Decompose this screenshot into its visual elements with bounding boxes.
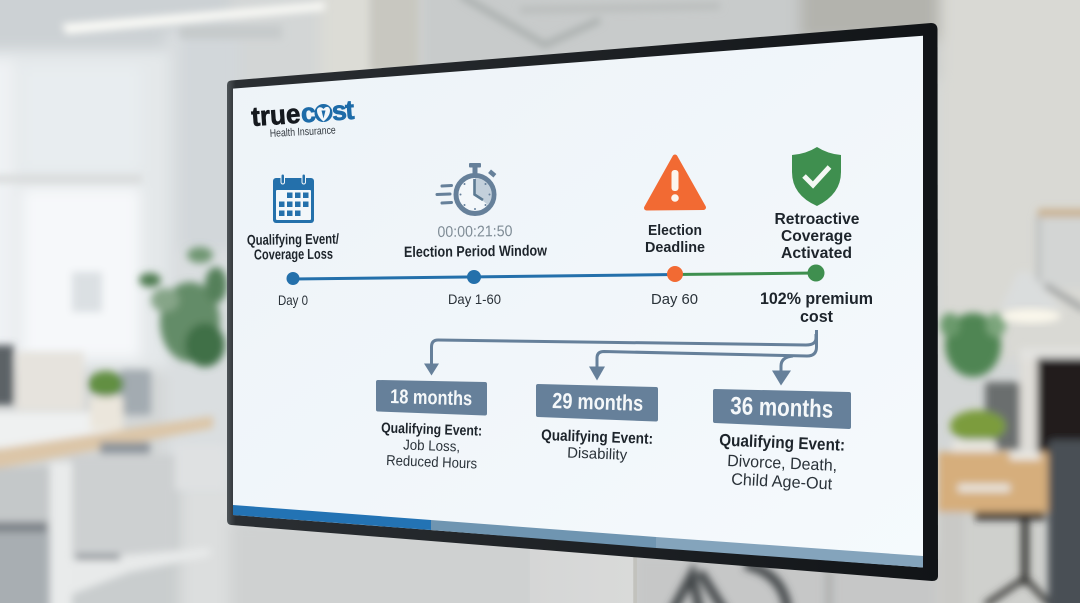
timeline day labels [278, 291, 698, 308]
pendant lamp [1000, 272, 1062, 310]
panel: 36 months: Divorce, Death, [727, 452, 838, 475]
timeline day labels: Day 0 [278, 292, 308, 308]
panel: 36 months: Child Age-Out [731, 471, 833, 493]
panel: 29 months [538, 386, 656, 464]
logo [250, 95, 355, 140]
panel: 18 months: Qualifying Event: [381, 421, 482, 440]
ceiling beam [460, 0, 600, 45]
monitor stand [530, 546, 637, 603]
column [370, 0, 419, 72]
right shelf and dark monitor [1020, 348, 1080, 360]
panel: 36 months [715, 391, 849, 493]
icon: warning triangle [646, 157, 704, 208]
icon: heart [314, 104, 332, 122]
panel: 18 months [378, 382, 485, 472]
right desk [938, 452, 1080, 512]
step headings: Activated [781, 245, 852, 262]
icon: green shield [792, 147, 841, 206]
step headings: Qualifying Event/ [247, 232, 339, 249]
step headings: Election Period Window [404, 243, 547, 261]
icon: stopwatch [437, 163, 496, 214]
panel: 18 months: Job Loss, [403, 438, 460, 455]
chair base under monitor [672, 565, 788, 603]
panel: 18 months: 18 months [390, 386, 472, 410]
premium cost note: cost [800, 308, 833, 326]
timeline [286, 264, 824, 285]
pendant lamp glow [1001, 309, 1061, 323]
window bar [0, 175, 142, 183]
logo: Health Insurance [270, 125, 336, 140]
panel: 36 months: Qualifying Event: [719, 431, 845, 455]
step headings [247, 211, 860, 263]
panel: 29 months: Disability [567, 445, 628, 464]
right plants [945, 313, 1001, 377]
ceiling light [62, 2, 325, 34]
premium cost note: 102% premium [760, 290, 873, 308]
screen panel [233, 36, 923, 567]
timeline day labels: Day 60 [651, 291, 698, 308]
panel: 18 months: Reduced Hours [386, 453, 477, 472]
timer readout: 00:00:21:50 [437, 223, 513, 241]
step headings: Election [648, 222, 702, 239]
panel: 29 months: Qualifying Event: [541, 427, 653, 448]
right wall picture [1040, 216, 1080, 288]
progress bar [233, 505, 923, 568]
branching arrows [424, 330, 816, 386]
panel: 36 months: 36 months [730, 392, 834, 424]
panel: 29 months: 29 months [552, 388, 644, 416]
premium cost note [760, 290, 873, 326]
icon: calendar [273, 174, 314, 223]
step headings: Coverage Loss [254, 247, 333, 263]
step headings: Deadline [645, 239, 705, 256]
step headings: Coverage [781, 228, 852, 245]
left desk scene [0, 345, 14, 405]
floor [170, 490, 240, 603]
logo: cost [300, 95, 355, 129]
wall and ceiling zones [0, 0, 230, 60]
window [0, 50, 168, 370]
monitor bezel [227, 23, 938, 581]
step headings: Retroactive [774, 211, 860, 228]
left office plant [139, 247, 227, 367]
logo: true [250, 99, 301, 132]
timeline day labels: Day 1-60 [448, 291, 501, 307]
